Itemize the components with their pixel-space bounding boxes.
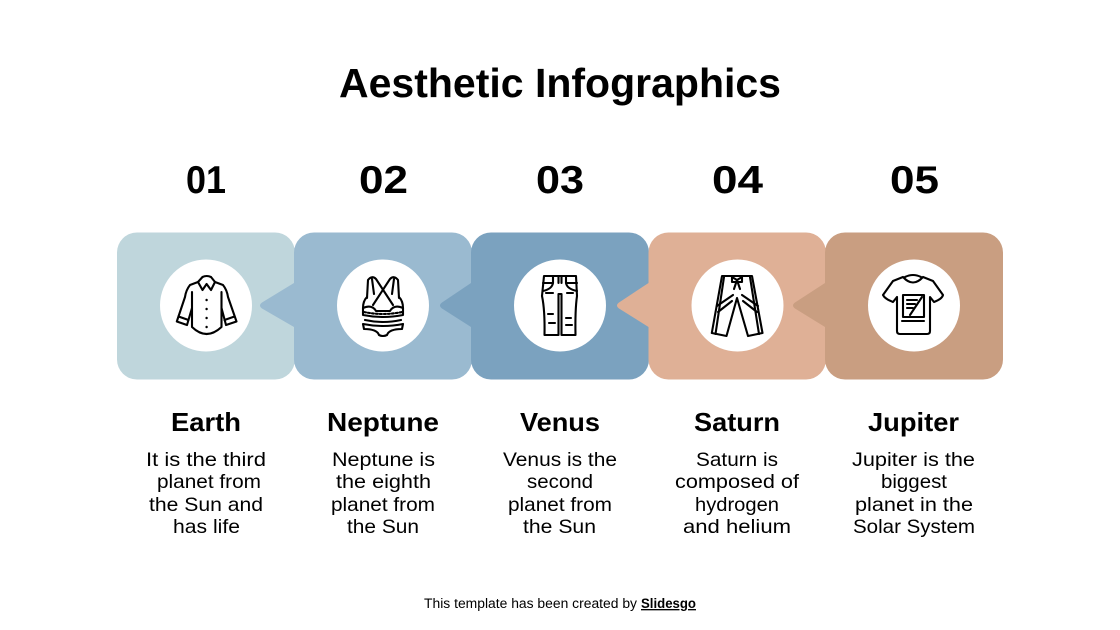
card 3 with pointer <box>440 232 649 380</box>
name: Jupiter: Jupiter <box>868 407 959 437</box>
description 3 <box>503 449 617 538</box>
description 5: Solar System <box>853 516 975 538</box>
number 02: 02 <box>359 159 408 202</box>
description 1: planet from <box>157 471 261 493</box>
icon: shirt <box>177 276 236 334</box>
description 5 <box>852 449 975 538</box>
description 4: hydrogen <box>695 494 779 516</box>
description 2: the eighth <box>336 471 431 493</box>
description 3: Venus is the <box>503 449 617 471</box>
panel: step 03 Venus <box>440 159 649 538</box>
name: Saturn: Saturn <box>694 407 780 437</box>
description 2: planet from <box>331 494 435 516</box>
description 5: biggest <box>881 471 948 493</box>
panel: step 04 Saturn <box>617 159 826 538</box>
description 2 <box>331 449 435 538</box>
name: Earth: Earth <box>171 407 241 437</box>
name: Venus: Venus <box>520 407 600 437</box>
description 1: It is the third <box>146 449 266 471</box>
panel: step 05 Jupiter <box>793 159 1003 538</box>
name: Neptune: Neptune <box>327 407 439 437</box>
number 03: 03 <box>536 159 584 202</box>
icon circle 1 <box>160 260 252 352</box>
description 1 <box>146 449 266 538</box>
number 04: 04 <box>712 159 763 202</box>
description 1: the Sun and <box>149 494 263 516</box>
description 2: the Sun <box>347 516 419 538</box>
description 1: has life <box>173 516 240 538</box>
description 3: the Sun <box>523 516 596 538</box>
description 4: Saturn is <box>696 449 778 471</box>
icon: printed t-shirt <box>883 275 943 334</box>
description 4 <box>675 449 800 538</box>
number 01: 01 <box>186 159 226 202</box>
description 5: planet in the <box>855 494 973 516</box>
icon: jeans <box>542 276 577 335</box>
card 4 with pointer <box>617 232 826 380</box>
footer credit: This template has been created by <box>424 596 637 611</box>
icon circle 4 <box>692 260 784 352</box>
description 2: Neptune is <box>332 449 435 471</box>
description 4: and helium <box>683 516 791 538</box>
icon circle 2 <box>337 260 429 352</box>
card 2 with pointer <box>260 232 472 380</box>
icon: lingerie set <box>363 277 403 336</box>
title: Aesthetic Infographics <box>339 60 781 106</box>
card 1 <box>117 232 295 380</box>
panel: step 02 Neptune <box>260 159 472 538</box>
description 3: second <box>527 471 593 493</box>
description 5: Jupiter is the <box>852 449 975 471</box>
card 5 with pointer <box>793 232 1003 380</box>
footer credit: Slidesgo <box>641 596 696 611</box>
number 05: 05 <box>890 159 939 202</box>
description 4: composed of <box>675 471 800 493</box>
icon: track pants <box>712 276 762 336</box>
icon circle 5 <box>868 260 960 352</box>
icon circle 3 <box>514 260 606 352</box>
panel: step 01 Earth <box>117 159 295 538</box>
description 3: planet from <box>508 494 612 516</box>
